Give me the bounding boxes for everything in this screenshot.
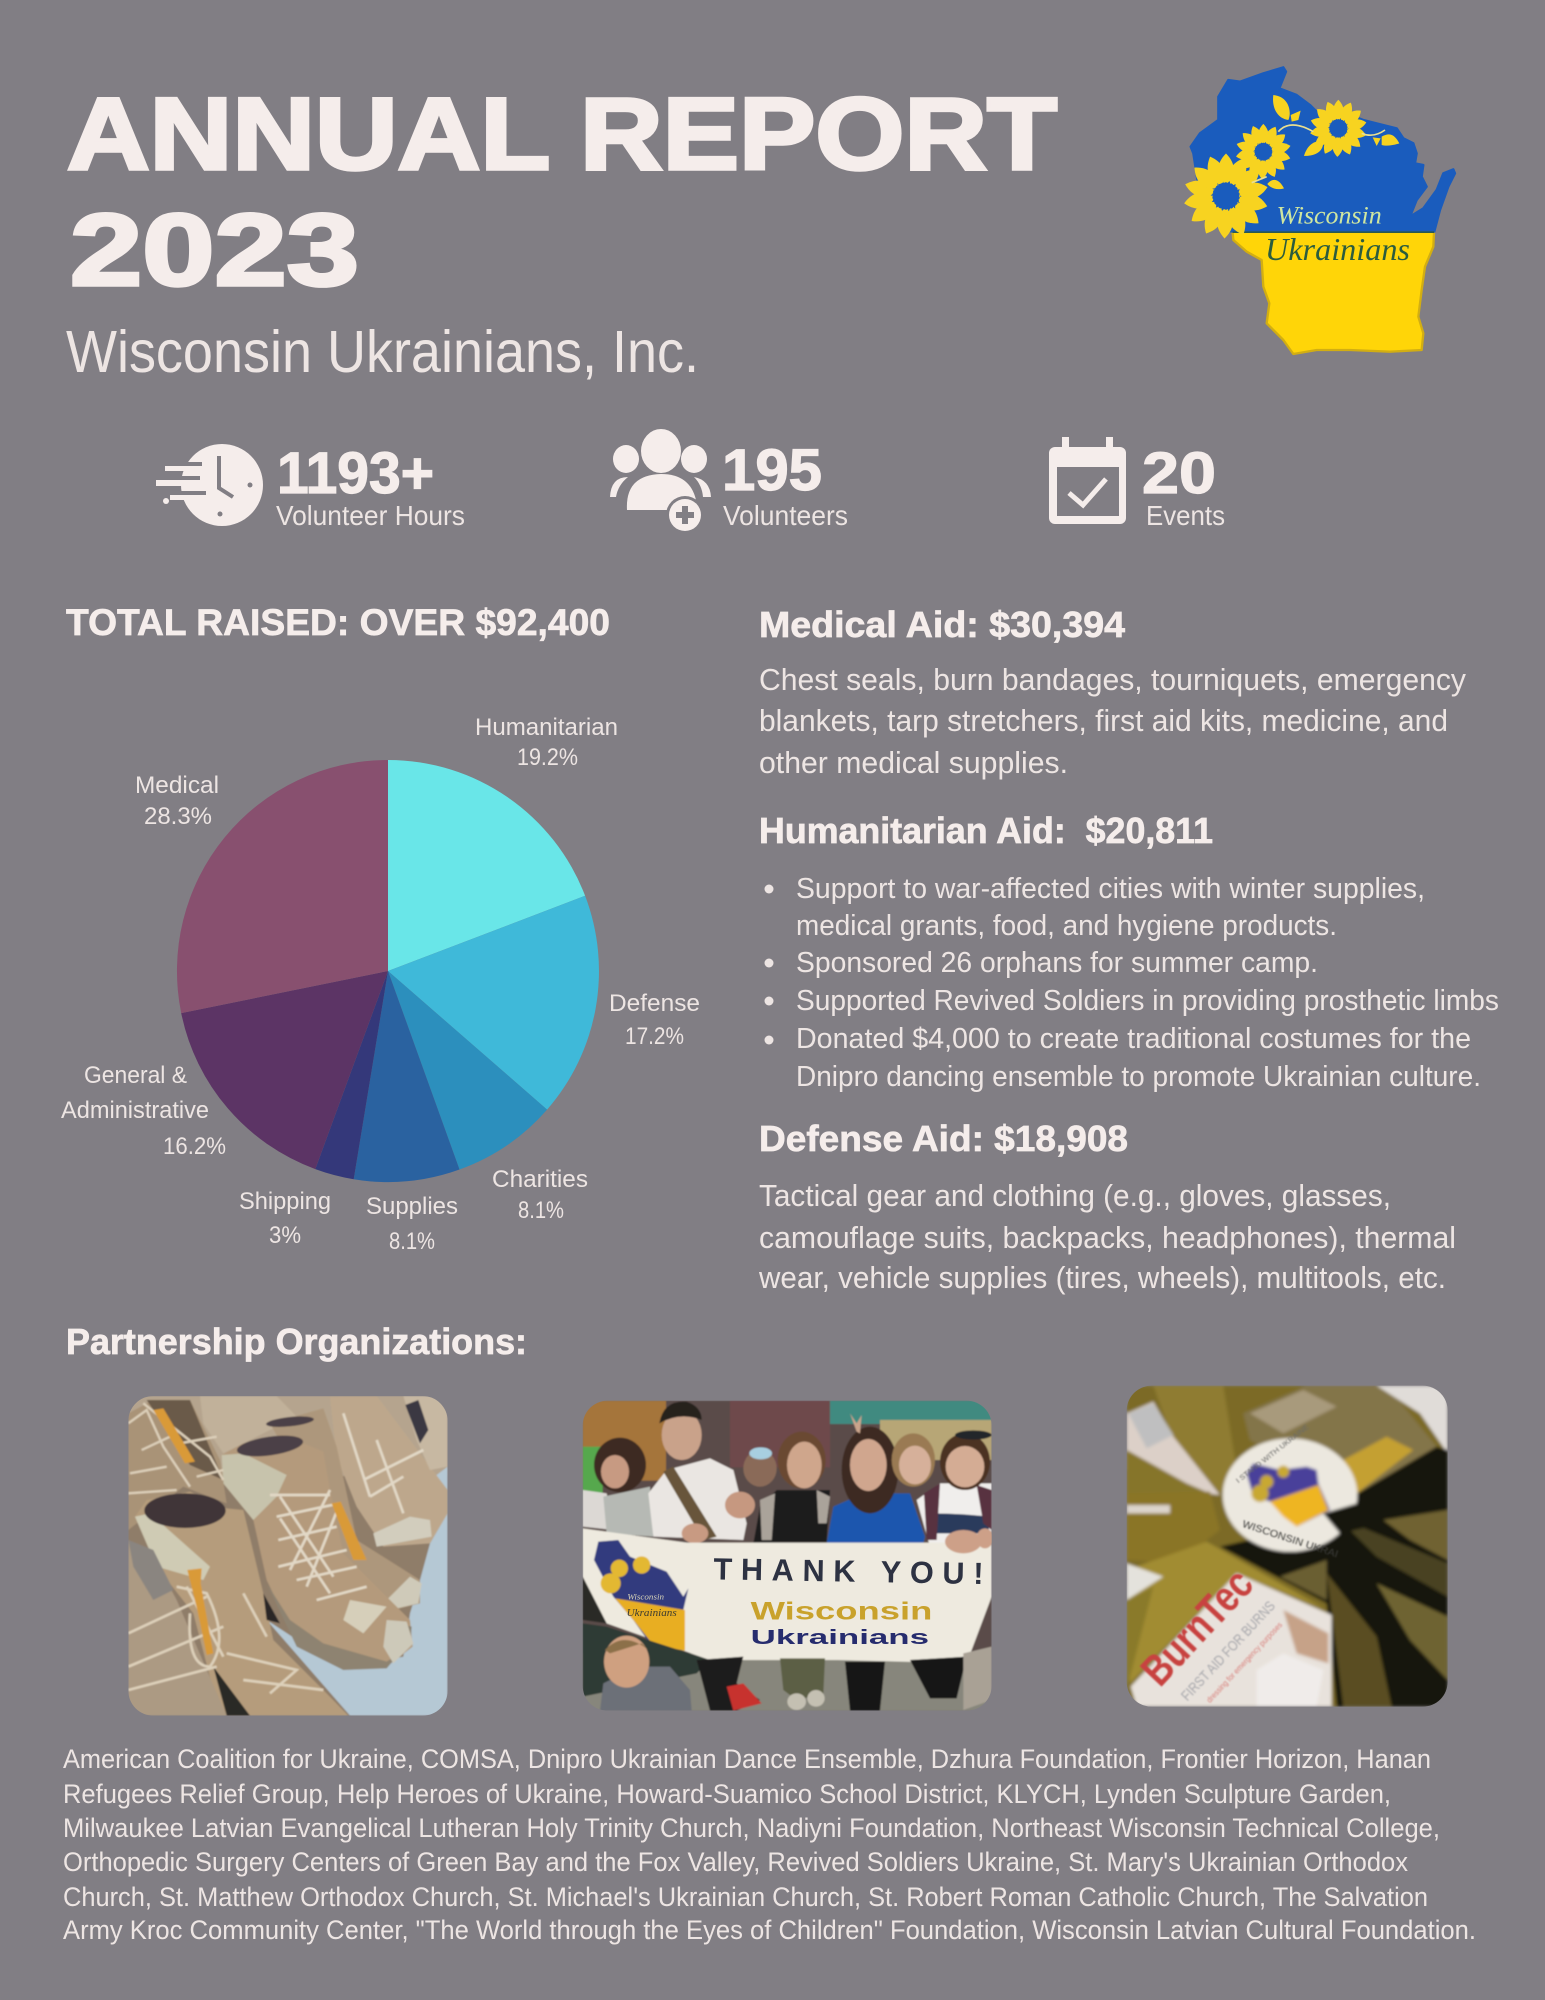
pie labels: 8.1% xyxy=(518,1197,564,1224)
text block: medical aid xyxy=(759,662,1466,780)
pie chart xyxy=(177,760,599,1182)
heading: defense aid: Defense Aid: $18,908 xyxy=(759,1118,1128,1159)
logo: Wisconsin Ukrainians state map: Ukrainians xyxy=(1265,231,1410,267)
stat: volunteer hours: Volunteer Hours xyxy=(276,500,465,531)
text block: partner organizations list: Army Kroc Community Center, "The World through the Eyes of Children" Foundation, Wisconsin Latvian Cultural Foundation. xyxy=(63,1915,1476,1945)
list: humanitarian aid: Sponsored 26 orphans for summer camp. xyxy=(796,947,1318,979)
pie labels: 28.3% xyxy=(144,803,212,830)
text block: partner organizations list: Church, St. Matthew Orthodox Church, St. Michael's Ukrainian Church, St. Robert Roman Catholic Church, The Salvation xyxy=(63,1882,1428,1912)
photo: thank you banner group: Ukrainians xyxy=(627,1608,677,1619)
logo: Wisconsin Ukrainians state map xyxy=(1183,67,1455,354)
pie labels: Medical xyxy=(135,772,219,799)
text block: partner organizations list: Orthopedic Surgery Centers of Green Bay and the Fox Valley, Revived Soldiers Ukraine, St. Mary's Ukrainian Orthodox xyxy=(63,1847,1408,1877)
text block: partner organizations list xyxy=(63,1744,1476,1945)
photo: burn dressings with sticker: FIRST AID FOR BURNS xyxy=(1179,1598,1279,1704)
stat: volunteer hours xyxy=(156,441,465,531)
pie labels: Supplies xyxy=(366,1193,458,1220)
stats row xyxy=(156,429,1225,534)
pie labels: Administrative xyxy=(61,1097,209,1124)
list: humanitarian aid xyxy=(764,873,1499,1093)
heading: total raised: TOTAL RAISED: OVER $92,400 xyxy=(66,602,610,643)
heading: humanitarian aid: Humanitarian Aid: $20,811 xyxy=(759,810,1213,851)
list: humanitarian aid: Donated $4,000 to create traditional costumes for the xyxy=(796,1023,1471,1055)
text block: medical aid: other medical supplies. xyxy=(759,745,1068,780)
stat: events: Events xyxy=(1146,500,1225,531)
pie labels: 16.2% xyxy=(163,1133,226,1160)
list: humanitarian aid: Support to war-affected cities with winter supplies, xyxy=(796,873,1425,905)
pie labels: 19.2% xyxy=(517,744,578,771)
icon: people with plus xyxy=(610,429,711,534)
photo: thank you banner group: Ukrainians xyxy=(751,1626,929,1649)
photo: tactical boots xyxy=(128,1396,448,1716)
text block: medical aid: Chest seals, burn bandages, tourniquets, emergency xyxy=(759,662,1466,697)
text block: defense aid: Tactical gear and clothing (e.g., gloves, glasses, xyxy=(759,1178,1391,1213)
photo: thank you banner group xyxy=(583,1401,993,1711)
stat: volunteer hours: 1193+ xyxy=(277,441,434,506)
icon: clock xyxy=(156,444,263,526)
pie labels: Shipping xyxy=(239,1188,331,1215)
pie labels xyxy=(61,714,700,1255)
stat: volunteers: Volunteers xyxy=(723,500,848,531)
photo: burn dressings with sticker: BurnTec xyxy=(1132,1560,1263,1695)
list: humanitarian aid: Supported Revived Soldiers in providing prosthetic limbs xyxy=(796,985,1499,1017)
logo: Wisconsin Ukrainians state map: Wisconsin xyxy=(1277,201,1382,229)
pie labels: 3% xyxy=(269,1222,301,1249)
text block: partner organizations list: American Coalition for Ukraine, COMSA, Dnipro Ukrainian Dance Ensemble, Dzhura Foundation, Frontier Horizon, Hanan xyxy=(63,1744,1431,1774)
title xyxy=(67,77,1057,307)
photo: thank you banner group: Wisconsin xyxy=(751,1597,932,1625)
list: humanitarian aid: medical grants, food, and hygiene products. xyxy=(796,910,1337,942)
photo: burn dressings with sticker: WISCONSIN UKRAI xyxy=(1241,1519,1339,1560)
pie labels: 8.1% xyxy=(389,1228,435,1255)
pie labels: Humanitarian xyxy=(475,714,618,741)
text block: partner organizations list: Milwaukee Latvian Evangelical Lutheran Holy Trinity Church, Nadiyni Foundation, Northeast Wisconsin Technical College, xyxy=(63,1813,1440,1843)
pie labels: Defense xyxy=(609,990,700,1017)
pie labels: 17.2% xyxy=(625,1023,684,1050)
text block: defense aid: camouflage suits, backpacks, headphones), thermal xyxy=(759,1220,1456,1255)
photo: thank you banner group: THANK YOU! xyxy=(713,1552,984,1591)
text block: defense aid: wear, vehicle supplies (tires, wheels), multitools, etc. xyxy=(758,1260,1446,1295)
photo: thank you banner group: Wisconsin xyxy=(627,1591,664,1601)
title: 2023 xyxy=(70,193,359,307)
stat: events: 20 xyxy=(1142,441,1216,506)
heading: partnership organizations: Partnership Organizations: xyxy=(66,1321,527,1362)
stat: events xyxy=(1049,437,1225,531)
list: humanitarian aid: Dnipro dancing ensemble to promote Ukrainian culture. xyxy=(796,1061,1481,1093)
photo: burn dressings with sticker: dressing for emergency purposes xyxy=(1205,1621,1284,1705)
title: ANNUAL REPORT xyxy=(67,77,1057,191)
stat: volunteers xyxy=(610,429,848,534)
text block: medical aid: blankets, tarp stretchers, first aid kits, medicine, and xyxy=(759,703,1448,738)
pie labels: General & xyxy=(84,1062,187,1089)
photo: burn dressings with sticker xyxy=(1127,1386,1448,1707)
pie labels: Charities xyxy=(492,1166,588,1193)
photo: burn dressings with sticker: I STAND WITH UKRAINE xyxy=(1234,1422,1311,1485)
text block: defense aid xyxy=(758,1178,1456,1295)
text block: partner organizations list: Refugees Relief Group, Help Heroes of Ukraine, Howard-Suamico School District, KLYCH, Lynden Sculpture Garden, xyxy=(63,1779,1391,1809)
subtitle: Wisconsin Ukrainians, Inc. xyxy=(66,319,699,385)
heading: medical aid: Medical Aid: $30,394 xyxy=(759,604,1125,645)
stat: volunteers: 195 xyxy=(722,438,822,503)
icon: calendar with check xyxy=(1049,437,1126,524)
